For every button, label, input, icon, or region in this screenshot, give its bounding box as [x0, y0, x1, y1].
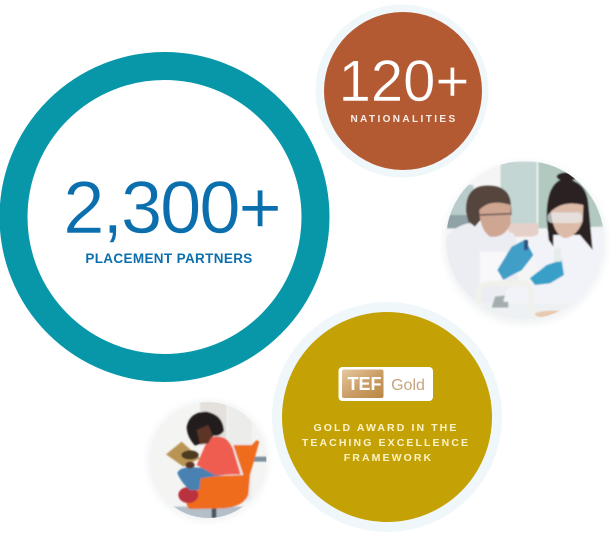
logo: TEF Gold: Gold: [391, 377, 425, 394]
label: gold award text: TEACHING EXCELLENCE: [302, 437, 470, 449]
label: nationalities: NATIONALITIES: [350, 114, 458, 125]
logo: TEF Gold: [338, 367, 433, 401]
left scientist: [456, 222, 518, 279]
stat number: 2,300+: 2,300+: [63, 166, 280, 249]
stat number: 120+: 120+: [339, 49, 469, 114]
logo: TEF Gold: TEF: [348, 374, 382, 394]
hair: [187, 412, 224, 446]
label: gold award text: FRAMEWORK: [344, 452, 433, 464]
panel: nationalities circle: [316, 4, 488, 178]
cushion and legs: [178, 487, 198, 503]
photo: two scientists in a lab: [444, 161, 606, 324]
panel: placement partners ring: [14, 66, 316, 368]
photo: student reading in an orange chair: [148, 402, 268, 520]
torso: [197, 437, 241, 475]
label: gold award text: GOLD AWARD IN THE: [313, 422, 458, 434]
label: placement partners: PLACEMENT PARTNERS: [85, 251, 253, 266]
panel: TEF gold award circle: [272, 302, 502, 532]
right scientist: [503, 227, 605, 303]
clamp stand: [480, 281, 534, 304]
chair: [187, 440, 259, 509]
book: [166, 442, 200, 467]
gloves: [497, 240, 533, 280]
